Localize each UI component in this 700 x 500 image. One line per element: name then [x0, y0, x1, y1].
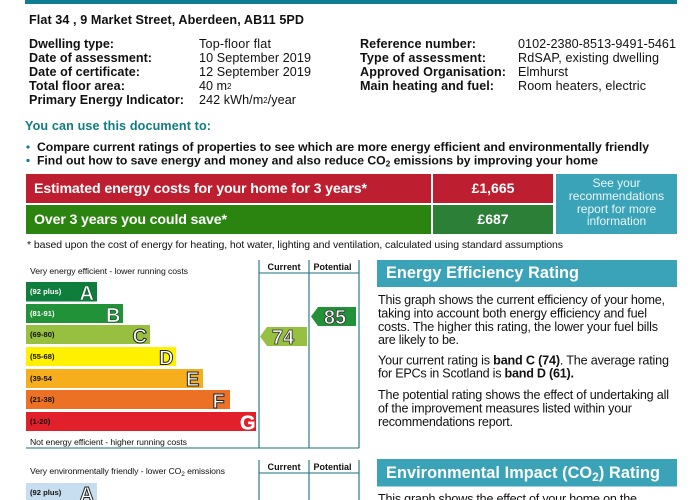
estimated costs row: £1,665 [472, 180, 515, 196]
reference number [360, 37, 676, 51]
band D [26, 347, 176, 370]
current rating arrow [260, 327, 307, 349]
bullet two: emissions by improving your home [390, 154, 598, 168]
primary energy indicator: 242 kWh/m [199, 93, 263, 107]
estimated costs row: Estimated energy costs for your home for 3 years* [34, 181, 367, 197]
address: Flat 34 , 9 Market Street, Aberdeen, AB11 5PD [29, 13, 304, 27]
savings row: £687 [477, 211, 509, 227]
potential rating text: The potential rating shows the effect of undertaking all [378, 388, 669, 402]
date of certificate: 12 September 2019 [199, 65, 311, 79]
recommendations callout: report for more [577, 202, 657, 216]
reference number: Reference number: [360, 37, 476, 51]
main heating and fuel: Main heating and fuel: [360, 79, 494, 93]
current rating text: Your current rating is band C (74). The average rating [378, 354, 669, 368]
total floor area: 2 [227, 82, 232, 91]
dwelling details right [360, 37, 676, 93]
band A: (92 plus) [30, 287, 62, 296]
energy efficiency panel [377, 260, 677, 429]
band E [26, 369, 203, 391]
heading: Environmental Impact (CO [386, 464, 592, 482]
top banner [25, 0, 677, 4]
type of assessment: Type of assessment: [360, 51, 486, 65]
type of assessment [360, 51, 659, 65]
band C: (69-80) [30, 330, 55, 339]
dwelling details left [29, 37, 311, 107]
heading: ) Rating [599, 464, 660, 482]
band A: A [80, 283, 94, 305]
band B [26, 304, 123, 327]
reference number: 0102-2380-8513-9491-5461 [518, 37, 676, 51]
band B: (81-91) [30, 309, 55, 318]
recommendations callout: See your [592, 176, 641, 190]
band F: F [212, 391, 225, 413]
dwelling type: Top-floor flat [199, 37, 272, 51]
savings row [26, 205, 553, 234]
column grid: Potential [314, 462, 352, 472]
main heating and fuel [360, 79, 646, 93]
band B: B [106, 305, 120, 327]
estimated costs row [26, 174, 553, 203]
total floor area: 40 m [199, 79, 227, 93]
main heating and fuel: Room heaters, electric [518, 79, 646, 93]
primary energy indicator: Primary Energy Indicator: [29, 93, 184, 107]
column grid [26, 260, 359, 448]
primary energy indicator: 2 [263, 96, 268, 105]
heading [377, 260, 677, 287]
recommendations callout: information [587, 214, 646, 228]
band C [26, 325, 150, 348]
top caption: Very energy efficient - lower running costs [30, 266, 189, 276]
recommendations callout: recommendations [569, 189, 664, 203]
date of assessment: Date of assessment: [29, 51, 152, 65]
total floor area: Total floor area: [29, 79, 125, 93]
band A [26, 483, 97, 500]
top caption: emissions [185, 466, 226, 476]
energy efficiency chart [26, 260, 359, 448]
dwelling type: Dwelling type: [29, 37, 114, 51]
column grid: Current [268, 462, 300, 472]
bullet two: Find out how to save energy and money and also reduce CO [37, 154, 386, 168]
recommendations callout [556, 174, 677, 234]
heading: Energy Efficiency Rating [386, 264, 579, 282]
date of certificate [29, 65, 311, 79]
band G: G [240, 412, 256, 434]
environmental impact chart [26, 460, 359, 500]
column grid: Potential [314, 262, 352, 272]
description [378, 293, 665, 347]
environmental impact panel [377, 459, 677, 500]
band D: D [159, 348, 173, 370]
current rating text: for EPCs in Scotland is band D (61). [378, 366, 574, 380]
band E: E [186, 369, 199, 391]
bullet one: Compare current ratings of properties to see which are more energy efficient and environmentally friendly [37, 140, 649, 154]
potential rating text: of the improvement measures listed within your [378, 402, 632, 416]
description: This graph shows the current efficiency of your home, [378, 293, 665, 307]
current rating arrow: 74 [272, 327, 295, 349]
band F: (21-38) [30, 395, 55, 404]
band A [26, 282, 97, 305]
description: are likely to be. [378, 333, 459, 347]
top caption: Very environmentally friendly - lower CO [30, 466, 181, 476]
column grid: Current [268, 262, 300, 272]
column grid [259, 460, 359, 500]
uses list [26, 140, 649, 168]
description: taking into account both energy efficiency and fuel [378, 306, 647, 320]
potential rating text [378, 388, 669, 429]
current rating text [378, 354, 669, 380]
dwelling type [29, 37, 272, 51]
potential rating arrow: 85 [324, 307, 346, 329]
primary energy indicator: /year [268, 93, 296, 107]
heading [377, 459, 677, 486]
bullet two: 2 [386, 158, 391, 168]
footnote: * based upon the cost of energy for heating, hot water, lighting and ventilation, calculated using standard assumptions [27, 239, 563, 251]
uses heading: You can use this document to: [25, 119, 211, 133]
heading: 2 [592, 470, 599, 484]
bullet two [26, 154, 598, 168]
band G: (1-20) [30, 417, 51, 426]
savings row: Over 3 years you could save* [34, 212, 227, 228]
band D: (55-68) [30, 352, 55, 361]
band G [26, 412, 256, 434]
approved organisation: Approved Organisation: [360, 65, 506, 79]
total floor area [29, 79, 232, 93]
description: costs. The higher this rating, the lower your fuel bills [378, 320, 658, 334]
primary energy indicator [29, 93, 296, 107]
band F [26, 390, 230, 413]
band E: (39-54 [30, 374, 53, 383]
approved organisation: Elmhurst [518, 65, 568, 79]
potential rating text: recommendations report. [378, 415, 513, 429]
type of assessment: RdSAP, existing dwelling [518, 51, 659, 65]
band C: C [132, 326, 147, 348]
band A: (92 plus) [30, 488, 62, 497]
date of certificate: Date of certificate: [29, 65, 140, 79]
potential rating arrow [311, 307, 356, 329]
bottom caption: Not energy efficient - higher running costs [30, 437, 188, 447]
date of assessment: 10 September 2019 [199, 51, 311, 65]
top caption: 2 [181, 471, 185, 478]
date of assessment [29, 51, 311, 65]
